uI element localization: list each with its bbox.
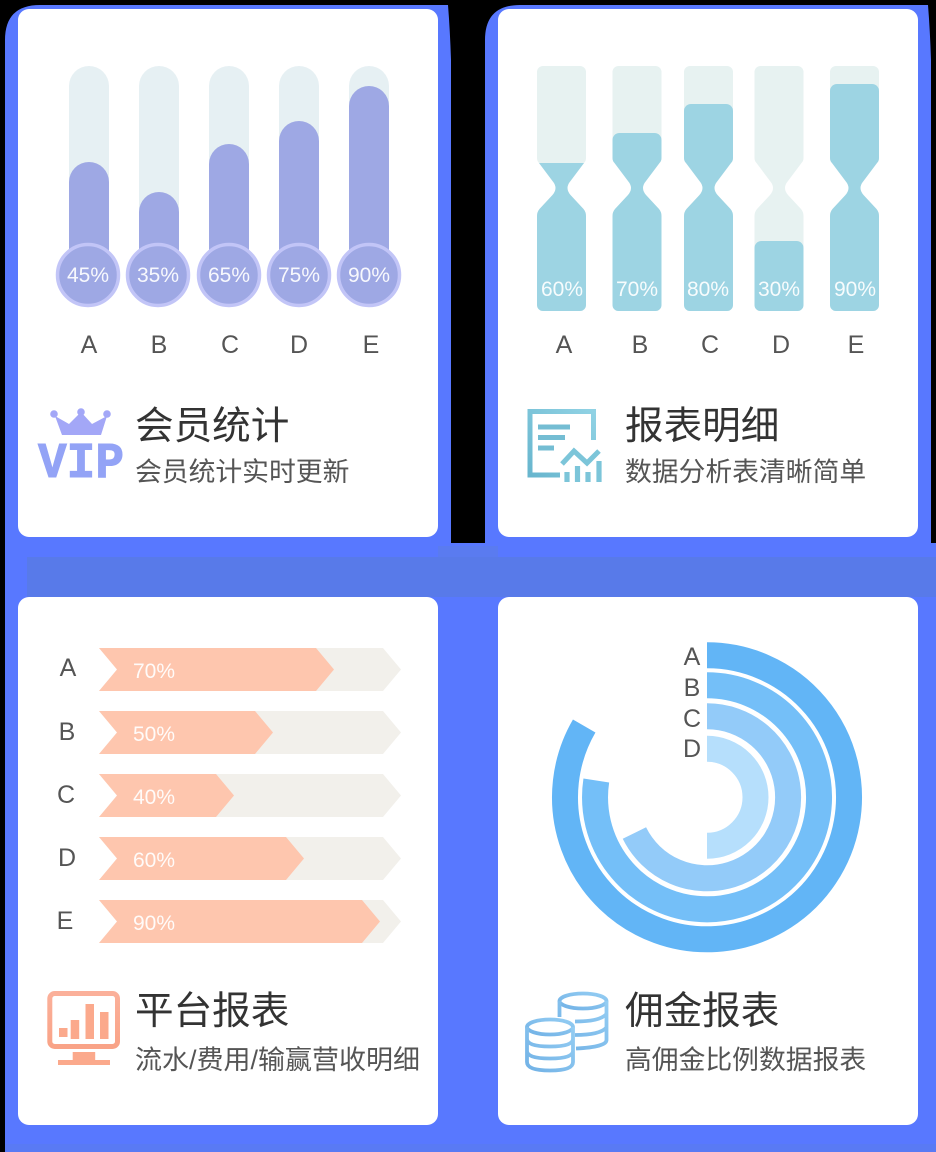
bar chart: arrow progress bars: 70% <box>133 660 175 683</box>
heading: 平台报表 <box>135 990 289 1033</box>
bar chart: thermometer bars: E <box>363 331 379 359</box>
bar chart: arrow progress bars: D <box>58 844 76 872</box>
bar chart: thermometer bars: C <box>221 331 239 359</box>
bar chart: thermometer bars: B <box>151 331 167 359</box>
bar chart: hourglass bars: B <box>632 331 648 359</box>
bar chart: thermometer bars: 90% <box>348 264 390 287</box>
bar chart: hourglass bars: 80% <box>687 278 729 301</box>
radial bar chart <box>565 643 849 939</box>
bar chart: arrow progress bars: B <box>59 718 75 746</box>
bar chart: hourglass bars: A <box>556 331 573 359</box>
bar chart: hourglass bars: C <box>701 331 719 359</box>
bar chart: hourglass bars: 30% <box>758 278 800 301</box>
bar chart: arrow progress bars: 60% <box>133 849 175 872</box>
radial bar chart: B <box>684 674 700 702</box>
bar chart: hourglass bars: 60% <box>541 278 583 301</box>
panel: report details <box>498 9 918 537</box>
heading: 会员统计 <box>135 405 289 448</box>
radial bar chart: D <box>683 735 701 763</box>
radial bar chart: C <box>683 705 701 733</box>
icon: VIP crown: VIP <box>38 436 124 493</box>
bar chart: hourglass bars: D <box>772 331 790 359</box>
bar chart: thermometer bars: 65% <box>208 264 250 287</box>
bar chart: hourglass bars: E <box>848 331 864 359</box>
bar chart: thermometer bars: 45% <box>67 264 109 287</box>
panel: platform report <box>18 597 438 1125</box>
text block: 高佣金比例数据报表 <box>625 1045 866 1075</box>
bar chart: hourglass bars <box>537 66 879 359</box>
panel: member statistics <box>18 9 438 537</box>
bar chart: hourglass bars: 70% <box>616 278 658 301</box>
text block: 数据分析表清晰简单 <box>625 457 866 487</box>
bar chart: thermometer bars: 35% <box>137 264 179 287</box>
bar chart: thermometer bars: A <box>81 331 98 359</box>
bar chart: arrow progress bars: 40% <box>133 786 175 809</box>
bar chart: thermometer bars: D <box>290 331 308 359</box>
bar chart: arrow progress bars: 90% <box>133 912 175 935</box>
icon: VIP crown <box>38 408 124 493</box>
bar chart: hourglass bars: 90% <box>834 278 876 301</box>
icon: monitor with bars <box>50 994 117 1065</box>
bar chart: arrow progress bars: 50% <box>133 723 175 746</box>
icon: report sheet <box>530 412 599 482</box>
text block: 流水/费用/输赢营收明细 <box>135 1045 420 1075</box>
bar chart: arrow progress bars: A <box>60 654 77 682</box>
bar chart: arrow progress bars: E <box>57 907 73 935</box>
heading: 报表明细 <box>625 405 779 448</box>
radial bar chart: A <box>684 643 701 671</box>
panel: commission report <box>498 597 918 1125</box>
bar chart: arrow progress bars: C <box>57 781 75 809</box>
bar chart: arrow progress bars <box>57 648 401 943</box>
bar chart: thermometer bars <box>58 66 400 359</box>
heading: 佣金报表 <box>625 990 779 1033</box>
icon: coin stacks <box>527 994 606 1070</box>
bar chart: thermometer bars: 75% <box>278 264 320 287</box>
text block: 会员统计实时更新 <box>135 457 349 487</box>
